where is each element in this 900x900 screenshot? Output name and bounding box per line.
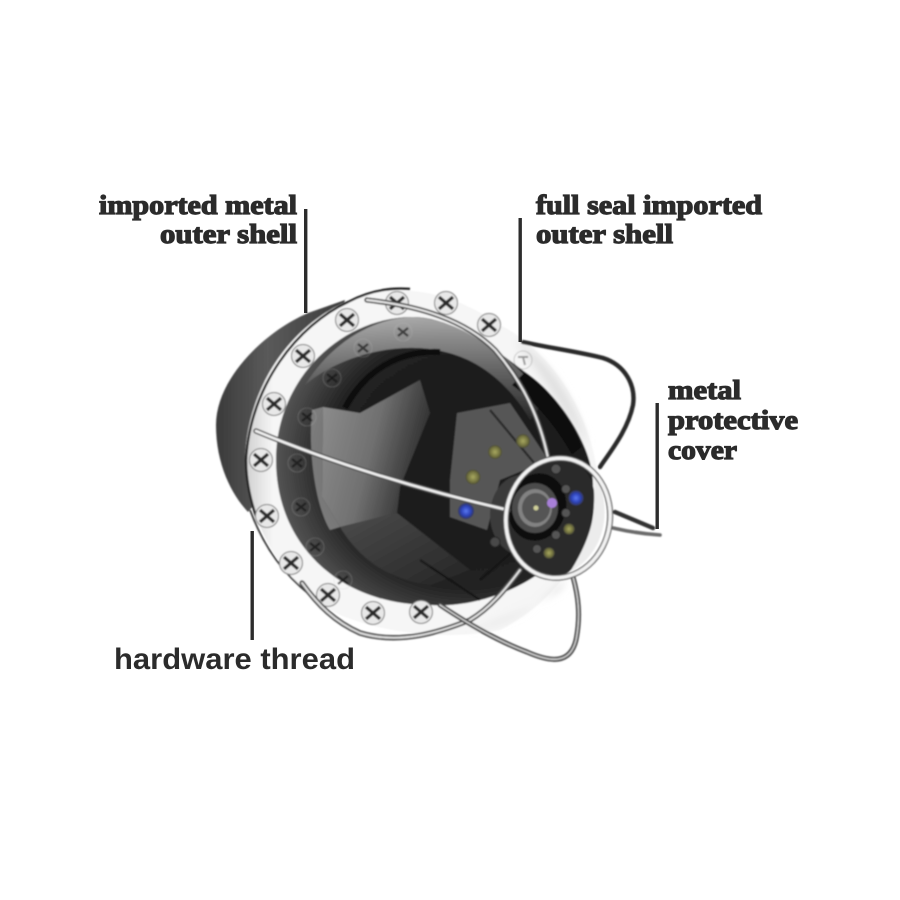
right black visor <box>512 372 582 455</box>
leader line: hardware thread <box>250 531 254 640</box>
text: full seal imported outer shell: full seal imported <box>536 190 762 220</box>
left dark inner band <box>345 352 440 408</box>
transparent dome shell and metal ring <box>245 290 597 635</box>
leader line: full seal outer shell <box>518 218 522 342</box>
cross-head screws on ring <box>250 292 500 624</box>
left grey interior panel <box>322 380 430 527</box>
right grey interior panel <box>450 403 548 530</box>
text: metal protective cover <box>668 375 798 465</box>
lens faceplate <box>506 458 594 576</box>
inner dark dome <box>276 317 593 605</box>
lens barrel <box>490 475 554 555</box>
camera illustration <box>216 289 660 659</box>
interior slats <box>420 410 540 600</box>
blue LED left <box>458 503 474 519</box>
left pale vertical band <box>311 407 340 530</box>
text: metal protective cover: protective <box>668 405 798 435</box>
metal protective cage wires <box>256 300 660 659</box>
leader line: imported metal outer shell <box>304 209 307 313</box>
ring outer edge <box>246 289 410 522</box>
lens metal ring highlight <box>498 451 618 585</box>
dome bottom highlight <box>470 540 590 630</box>
text: imported metal outer shell <box>99 190 298 249</box>
inner reflected screws <box>288 323 412 589</box>
lower grey interior panel <box>340 513 470 585</box>
text: full seal imported outer shell: outer shell <box>536 219 674 249</box>
rear metal housing <box>216 300 345 512</box>
blue LED on faceplate <box>568 490 584 506</box>
small LEDs around lens <box>490 464 574 558</box>
lens metal ring <box>498 451 618 585</box>
leader line: metal protective cover <box>656 403 659 529</box>
pale right side of lens ring <box>570 470 605 572</box>
lens <box>500 467 574 547</box>
faint screw on pale dome <box>514 351 532 369</box>
upper translucent band <box>305 317 545 420</box>
dome right highlight <box>515 340 588 445</box>
text: full seal imported outer shell <box>536 190 762 249</box>
yellow LEDs on panel <box>466 434 530 484</box>
text: imported metal outer shell: outer shell <box>160 219 298 249</box>
text: metal protective cover: cover <box>668 435 737 465</box>
text: metal protective cover: metal <box>668 375 742 405</box>
ring lower edge <box>250 510 310 595</box>
text: imported metal outer shell: imported metal <box>99 190 298 220</box>
text: hardware thread: hardware thread <box>114 643 355 676</box>
